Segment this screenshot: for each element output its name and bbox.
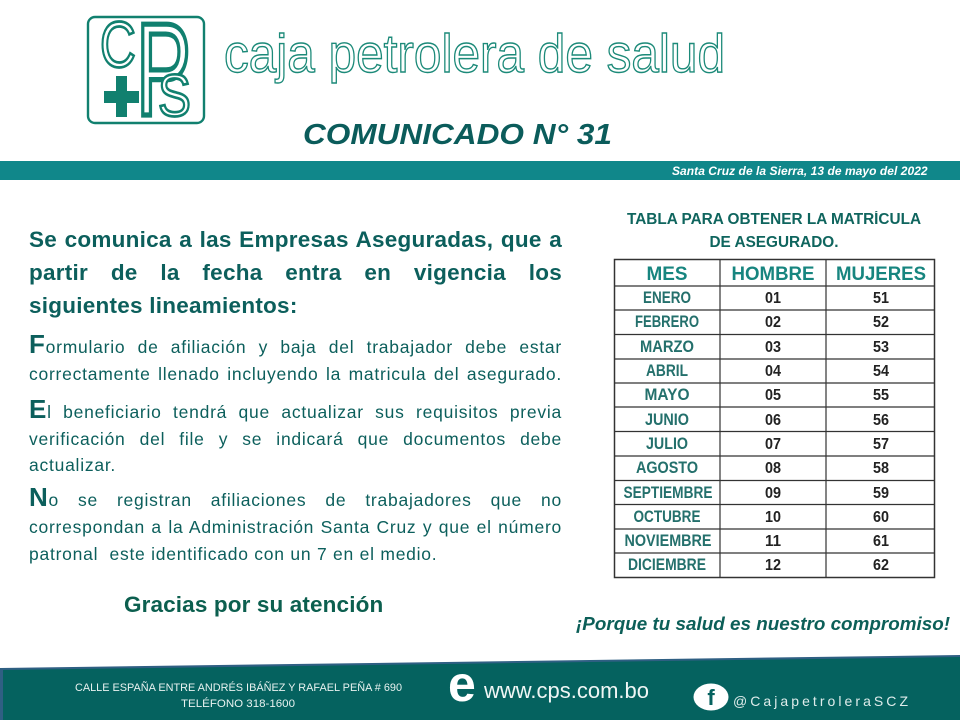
table: matrícula: MUJERES	[836, 264, 926, 285]
table: matrícula: NOVIEMBRE	[624, 532, 712, 550]
table: matrícula: 06	[765, 412, 781, 429]
logo: CPS emblem	[86, 0, 206, 130]
logo: CPS emblem: S	[158, 61, 191, 129]
table: matrícula: 05	[765, 387, 781, 404]
table: matrícula: 53	[873, 339, 889, 356]
table: matrícula: FEBRERO	[635, 313, 699, 331]
title: COMUNICADO N° 31	[303, 119, 612, 151]
table heading: TABLA PARA OBTENER LA MATRÍCULA	[627, 211, 921, 228]
closing thanks: Gracias por su atención	[124, 592, 383, 617]
icon: facebook: f	[707, 685, 715, 710]
table: matrícula: 51	[873, 290, 889, 307]
paragraph: beneficiario: actualizar.	[29, 455, 116, 475]
slogan: ¡Porque tu salud es nuestro compromiso!	[576, 614, 950, 634]
paragraph: formulario: Formulario de afiliación y baja del trabajador debe estar	[29, 329, 562, 359]
paragraph: beneficiario: El beneficiario tendrá que actualizar sus requisitos previa	[29, 394, 562, 424]
table: matrícula: 01	[765, 290, 781, 307]
wordmark: caja petrolera de salud	[224, 24, 725, 84]
website: www.cps.com.bo	[483, 678, 649, 703]
table: matrícula: 02	[765, 314, 781, 331]
table: matrícula: 60	[873, 509, 889, 526]
table heading: DE ASEGURADO.	[709, 234, 839, 250]
table: matrícula: SEPTIEMBRE	[624, 484, 712, 502]
table: matrícula: 07	[765, 436, 781, 453]
table: matrícula: 57	[873, 436, 889, 453]
footer address: TELÉFONO 318-1600	[181, 697, 295, 710]
table: matrícula: JULIO	[646, 435, 688, 453]
table: matrícula: 59	[873, 485, 889, 502]
footer address: CALLE ESPAÑA ENTRE ANDRÉS IBÁÑEZ Y RAFAEL PEÑA # 690	[75, 681, 402, 694]
table: matrícula: AGOSTO	[636, 459, 698, 477]
table: matrícula: 62	[873, 557, 889, 574]
table heading	[627, 211, 921, 250]
table: matrícula: 55	[873, 387, 889, 404]
paragraph: afiliaciones: patronal este identificado con un 7 en el medio.	[29, 544, 437, 564]
paragraph: formulario	[29, 329, 562, 384]
logo: CPS emblem: C	[100, 10, 136, 82]
paragraph: formulario: correctamente llenado incluyendo la matricula del asegurado.	[29, 364, 562, 384]
table: matrícula: 08	[765, 460, 781, 477]
table: matrícula: MARZO	[640, 338, 694, 356]
paragraph: afiliaciones: correspondan a la Administración Santa Cruz y que el número	[29, 517, 562, 537]
icon: web e: e	[448, 656, 476, 712]
table: matrícula: ENERO	[643, 289, 691, 307]
table: matrícula: DICIEMBRE	[628, 556, 706, 574]
paragraph: afiliaciones: No se registran afiliaciones de trabajadores que no	[29, 482, 562, 512]
table: matrícula: 12	[765, 557, 781, 574]
table: matrícula: MES	[646, 264, 688, 285]
table: matrícula: MAYO	[644, 386, 690, 404]
paragraph: afiliaciones	[29, 482, 562, 564]
table: matrícula: 11	[765, 533, 781, 550]
table: matrícula: 09	[765, 485, 781, 502]
table: matrícula: JUNIO	[645, 411, 689, 429]
table: matrícula: 52	[873, 314, 889, 331]
table: matrícula: 54	[873, 363, 889, 380]
table: matrícula: OCTUBRE	[634, 508, 700, 526]
facebook handle: @CajapetroleraSCZ	[733, 693, 908, 709]
table: matrícula: 56	[873, 412, 889, 429]
table: matrícula: 04	[765, 363, 781, 380]
table: matrícula: 03	[765, 339, 781, 356]
table: matrícula: 58	[873, 460, 889, 477]
table: matrícula: 10	[765, 509, 781, 526]
paragraph: beneficiario	[29, 394, 562, 475]
intro paragraph: Se comunica a las Empresas Aseguradas, que a	[29, 227, 562, 252]
table: matrícula: ABRIL	[646, 362, 688, 380]
intro paragraph: siguientes lineamientos:	[29, 293, 298, 318]
date: Santa Cruz de la Sierra, 13 de mayo del 2022	[672, 164, 928, 178]
intro paragraph	[29, 227, 562, 318]
table: matrícula: 61	[873, 533, 889, 550]
date band	[0, 161, 960, 180]
table: matrícula: HOMBRE	[732, 264, 814, 285]
paragraph: beneficiario: verificación del file y se indicará que documentos debe	[29, 429, 562, 449]
intro paragraph: partir de la fecha entra en vigencia los	[29, 260, 562, 285]
